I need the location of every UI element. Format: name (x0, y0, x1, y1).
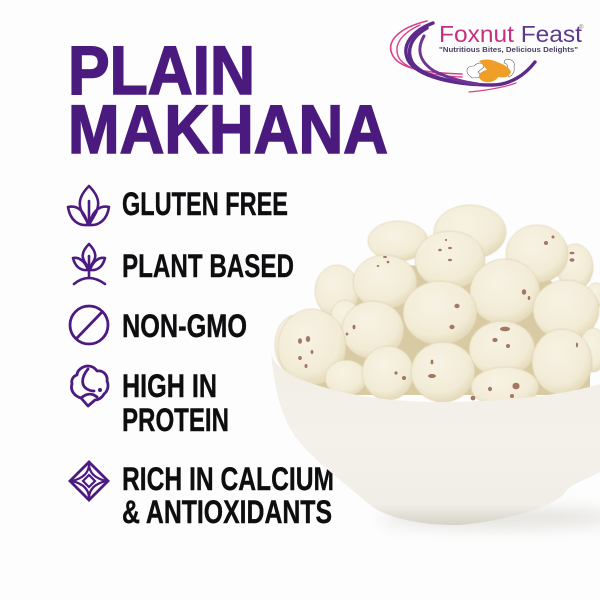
puff specks (298, 236, 578, 400)
plant based label: PLANT BASED (122, 248, 294, 284)
icon: protein leaf (high in protein) (71, 366, 108, 406)
logo wordmark: Foxnut Feast (439, 21, 582, 47)
logo mascot (467, 59, 514, 82)
logo tagline: "Nutritious Bites, Delicious Delights" (439, 45, 579, 54)
high in protein label: PROTEIN (122, 402, 229, 438)
icon: prohibition sign (non-GMO) (70, 306, 108, 344)
rich in calcium label (122, 461, 334, 530)
bowl shadow (380, 508, 600, 528)
high in protein label: HIGH IN (122, 368, 217, 404)
icon: lotus leaves (gluten free) (68, 186, 109, 225)
rich in calcium label: & ANTIOXIDANTS (122, 494, 332, 530)
title: PLAIN (68, 32, 255, 109)
rich in calcium label: RICH IN CALCIUM (122, 461, 334, 497)
icon: diamond (calcium and antioxidants) (70, 462, 108, 500)
logo swooshes (391, 21, 535, 92)
gaps between puffs (290, 265, 590, 395)
icon: sprout (plant based) (73, 244, 105, 284)
logo registered mark: ® (579, 24, 584, 31)
title (68, 32, 388, 168)
makhana puffs (275, 205, 600, 407)
high in protein label (122, 368, 229, 438)
non-gmo label: NON-GMO (122, 308, 247, 344)
protein dot (98, 388, 102, 392)
gluten free label: GLUTEN FREE (122, 186, 288, 222)
bowl body (271, 351, 600, 525)
logo: Foxnut Feast (391, 21, 584, 92)
photo: bowl of makhana (271, 205, 600, 528)
title: MAKHANA (68, 91, 388, 168)
